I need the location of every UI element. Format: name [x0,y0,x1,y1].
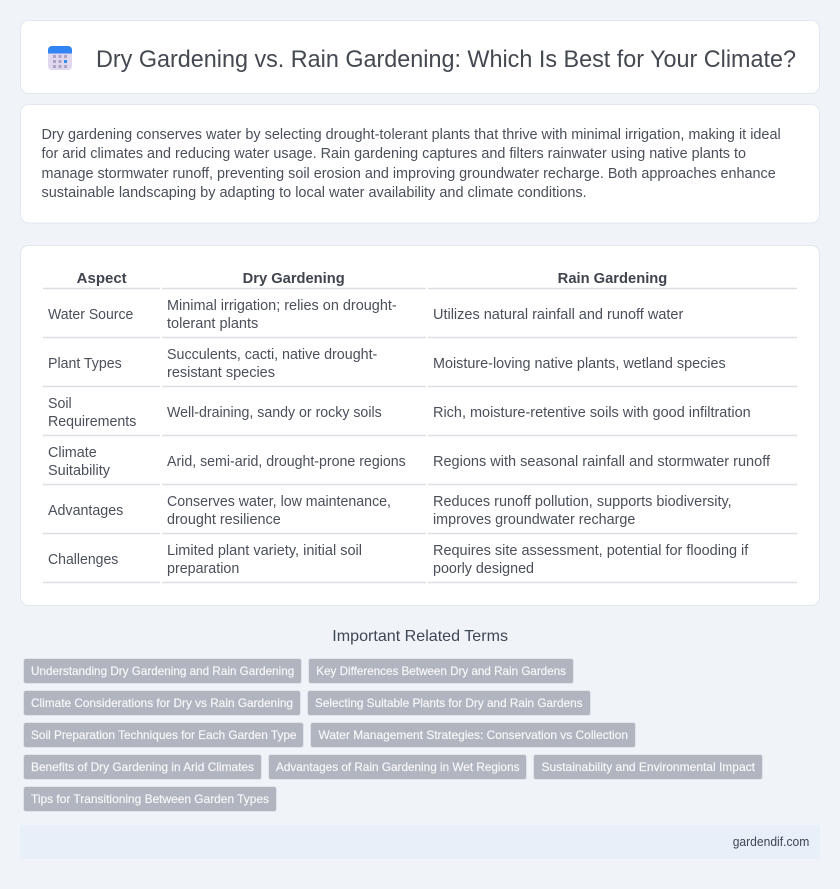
row: challenges: Challenges [48,552,118,568]
chip [24,690,300,716]
chip: Sustainability and Environmental Impact [542,760,756,774]
row: advantages: drought resilience [167,512,281,528]
footer bar [20,825,820,859]
row: soil requirements: Requirements [48,414,136,430]
icon: calendar [48,46,72,70]
row: soil requirements: Well-draining, sandy or rocky soils [167,405,382,421]
chip [24,786,276,812]
section heading: related terms: Important Related Terms [332,628,508,645]
row: advantages [48,494,732,528]
row: plant types: Plant Types [48,356,122,372]
row: plant types: Succulents, cacti, native drought- [167,347,377,363]
intro text block: sustainable landscaping by adapting to local water availability and climate conditions. [42,185,587,201]
intro text block: Dry gardening conserves water by selecting drought-tolerant plants that thrive with minimal irrigation, making it ideal [42,127,781,143]
row: climate suitability [48,445,771,479]
intro text block: manage stormwater runoff, preventing soil erosion and improving groundwater recharge. Both approaches enhance [42,166,776,182]
row: advantages: Reduces runoff pollution, supports biodiversity, [433,494,732,510]
chip: Soil Preparation Techniques for Each Garden Type [31,728,297,742]
chip: Key Differences Between Dry and Rain Gardens [316,664,566,678]
table header row: Rain Gardening [558,271,667,287]
row: water source [48,298,684,332]
row: water source: tolerant plants [167,316,258,332]
row: plant types: Moisture-loving native plants, wetland species [433,356,726,372]
row: plant types: resistant species [167,365,275,381]
chip [308,658,574,684]
row: challenges: Limited plant variety, initial soil [167,543,362,559]
row: advantages: Conserves water, low maintenance, [167,494,391,510]
row: soil requirements [48,396,751,430]
row: challenges: poorly designed [433,561,534,577]
row: climate suitability: Arid, semi-arid, drought-prone regions [167,454,406,470]
row: advantages: Advantages [48,503,123,519]
footer site name: gardendif.com [733,834,809,849]
row: soil requirements: Rich, moisture-retentive soils with good infiltration [433,405,751,421]
chip: Water Management Strategies: Conservation vs Collection [318,728,628,742]
intro text block: for arid climates and reducing water usage. Rain gardening captures and filters rainwater using native plants to [42,146,746,162]
chip [24,722,304,748]
chip [268,754,526,780]
panel: introduction [20,104,820,223]
row: advantages: improves groundwater recharge [433,512,635,528]
row: challenges: Requires site assessment, potential for flooding if [433,543,749,559]
row: climate suitability: Regions with seasonal rainfall and stormwater runoff [433,454,771,470]
chip: Climate Considerations for Dry vs Rain Gardening [31,696,293,710]
header panel [20,20,820,94]
row: water source: Minimal irrigation; relies on drought- [167,298,397,314]
row: climate suitability: Suitability [48,463,111,479]
chip: Selecting Suitable Plants for Dry and Rain Gardens [315,696,582,710]
table header row [77,271,667,287]
chip [24,658,302,684]
row: water source: Water Source [48,307,133,323]
chip [310,722,636,748]
chip [24,754,262,780]
row: soil requirements: Soil [48,396,72,412]
table header row: Dry Gardening [243,271,345,287]
panel: comparison table [20,246,820,606]
row: challenges: preparation [167,561,239,577]
intro text block [42,127,781,201]
chip: Tips for Transitioning Between Garden Types [31,792,269,806]
chip [534,754,762,780]
title: Dry Gardening vs. Rain Gardening: Which Is Best for Your Climate? [96,46,796,73]
chip: Benefits of Dry Gardening in Arid Climates [31,760,254,774]
chip [308,690,590,716]
chip: Advantages of Rain Gardening in Wet Regions [276,760,520,774]
row: climate suitability: Climate [48,445,97,461]
chip: Understanding Dry Gardening and Rain Gardening [31,664,294,678]
row: plant types [48,347,726,381]
row: water source: Utilizes natural rainfall and runoff water [433,307,684,323]
related terms chips [24,658,762,812]
table header row: Aspect [77,271,127,287]
row: challenges [48,543,749,577]
